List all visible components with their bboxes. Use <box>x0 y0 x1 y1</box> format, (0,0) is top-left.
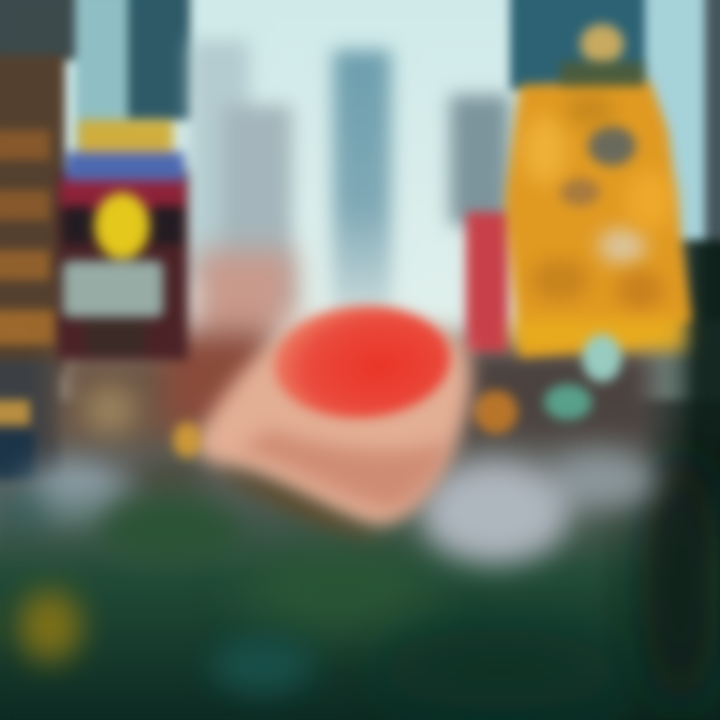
hand <box>173 313 472 540</box>
background: far buildings <box>75 0 720 320</box>
right yellow billboard <box>505 24 692 358</box>
left colourful billboard <box>58 120 188 360</box>
lower street base <box>0 400 720 720</box>
central tower <box>333 50 391 310</box>
foreground foliage <box>0 450 720 720</box>
right pavement highlights <box>420 452 655 564</box>
teal bottle shapes <box>474 334 622 434</box>
right red sign <box>466 212 508 352</box>
left brown building <box>0 0 75 480</box>
right dark edge <box>640 240 720 720</box>
red fruit <box>270 300 454 424</box>
street mid tones <box>55 250 660 445</box>
left pavement highlights <box>0 460 210 540</box>
